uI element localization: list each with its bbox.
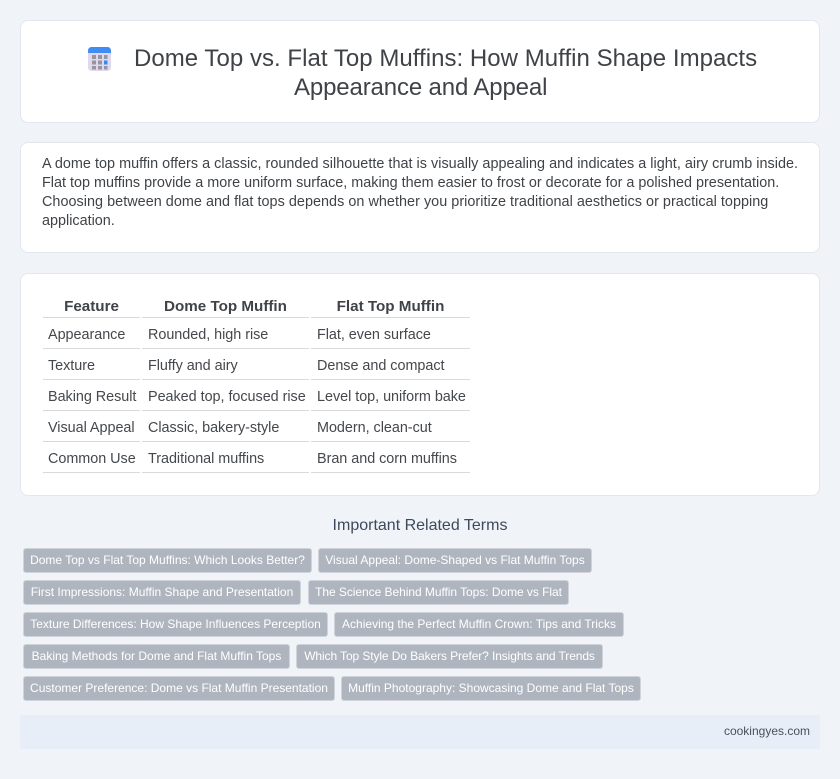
related term tags: Visual Appeal: Dome-Shaped vs Flat Muffin Tops [325, 553, 585, 567]
heading: related terms: Important Related Terms [333, 517, 507, 534]
table: Appearance [48, 327, 125, 343]
table: Fluffy and airy [148, 358, 238, 374]
text block: intro paragraph: A dome top muffin offers a classic, rounded silhouette that is visually appealing and indicates a light, airy crumb inside. [42, 156, 798, 172]
related term tags: Which Top Style Do Bakers Prefer? Insights and Trends [304, 649, 595, 663]
table: Traditional muffins [148, 451, 264, 467]
table: Bran and corn muffins [317, 451, 457, 467]
related term tags: First Impressions: Muffin Shape and Presentation [31, 585, 293, 599]
footer credit: cookingyes.com [724, 724, 810, 738]
table: Dense and compact [317, 358, 444, 374]
footer bar [20, 715, 820, 749]
table: Texture [48, 358, 95, 374]
title: Appearance and Appeal [294, 74, 547, 101]
related term tags: Dome Top vs Flat Top Muffins: Which Looks Better? [30, 553, 305, 567]
table header: Dome Top Muffin [164, 298, 287, 315]
related term tags: Baking Methods for Dome and Flat Muffin Tops [32, 649, 281, 663]
table header: Feature [64, 298, 119, 315]
related term tags: Achieving the Perfect Muffin Crown: Tips and Tricks [342, 617, 616, 631]
title: Dome Top vs. Flat Top Muffins: How Muffin Shape Impacts [134, 45, 757, 72]
panel: comparison table [20, 273, 820, 496]
related term tags: Texture Differences: How Shape Influences Perception [30, 617, 321, 631]
table: Visual Appeal [48, 420, 135, 436]
table [43, 298, 470, 473]
table header [64, 298, 444, 315]
table: Baking Result [48, 389, 136, 405]
related term tags [23, 548, 641, 701]
table: Peaked top, focused rise [148, 389, 306, 405]
panel: intro text [20, 142, 820, 253]
table header: Flat Top Muffin [337, 298, 444, 315]
title [134, 45, 757, 101]
table: Common Use [48, 451, 136, 467]
table: Modern, clean-cut [317, 420, 432, 436]
text block: intro paragraph: application. [42, 213, 115, 229]
table: Rounded, high rise [148, 327, 268, 343]
related term tags: Customer Preference: Dome vs Flat Muffin Presentation [30, 681, 328, 695]
icon: calendar [88, 47, 111, 71]
table: Level top, uniform bake [317, 389, 466, 405]
related term tags: Muffin Photography: Showcasing Dome and Flat Tops [348, 681, 634, 695]
related term tags: The Science Behind Muffin Tops: Dome vs Flat [315, 585, 562, 599]
table: Flat, even surface [317, 327, 431, 343]
text block: intro paragraph: Choosing between dome and flat tops depends on whether you prioritize traditional aesthetics or practical topping [42, 194, 768, 210]
header card [20, 20, 820, 123]
table: Classic, bakery-style [148, 420, 279, 436]
text block: intro paragraph [42, 156, 798, 229]
text block: intro paragraph: Flat top muffins provide a more uniform surface, making them easier to frost or decorate for a polished presentation. [42, 175, 779, 191]
